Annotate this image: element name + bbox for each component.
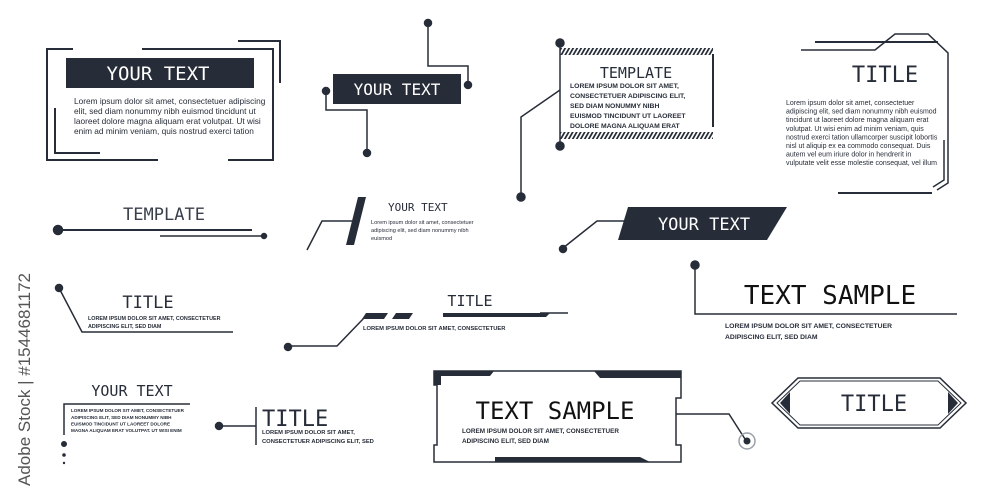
panel: template hatched box: CONSECTETUER ADIPISCING ELIT, (570, 93, 685, 100)
panel: template hatched box: SED DIAM NONUMMY NIBH (570, 103, 659, 110)
panel: template hatched box (517, 39, 713, 201)
panel: your text bracket (61, 382, 190, 464)
panel: your text framed box: elit, sed diam nonummy nibh euismod tincidunt ut (74, 106, 256, 116)
panel: your text framed box (47, 41, 280, 160)
panel: your text framed box: laoreet dolore magna aliquam erat volutpat. Ut wisi (74, 116, 261, 126)
panel: your text bracket: ADIPISCING ELIT, SED DIAM NONUMMY NIBH (71, 415, 172, 420)
panel: template underline: TEMPLATE (123, 205, 205, 225)
panel: template hatched box: TEMPLATE (600, 64, 672, 82)
panel: your text circuit label: YOUR TEXT (354, 80, 441, 99)
panel: title diagonal (56, 284, 233, 332)
panel: template hatched box: DOLORE MAGNA ALIQUAM ERAT (570, 123, 680, 130)
panel: your text framed box: YOUR TEXT (107, 63, 209, 85)
panel: text sample box: TEXT SAMPLE (476, 397, 634, 425)
panel: text sample underline: LOREM IPSUM DOLOR SIT AMET, CONSECTETUER (725, 323, 892, 330)
panel: title corner frame: Lorem ipsum dolor sit amet, consectetuer (786, 100, 915, 107)
panel: your text circuit label (322, 20, 472, 156)
panel: title corner frame: autem vel eum iriure dolor in hendrerit in (786, 152, 911, 159)
panel: title diagonal: LOREM IPSUM DOLOR SIT AMET, CONSECTETUER (88, 316, 221, 322)
panel: your text framed box: enim ad minim veniam, quis nostrud exerci tation (74, 126, 254, 136)
panel: title corner frame: nostrud exerci tation ullamcorper suscipit lobortis (786, 134, 938, 141)
panel: your text bracket: LOREM IPSUM DOLOR SIT AMET, CONSECTETUER (71, 408, 185, 413)
panel: text sample box: ADIPISCING ELIT, SED DIAM (462, 438, 549, 445)
panel: slanted bar label: YOUR TEXT (388, 201, 448, 214)
panel: title with pointer: LOREM IPSUM DOLOR SIT AMET, (262, 430, 355, 436)
panel: text sample underline: ADIPISCING ELIT, SED DIAM (725, 334, 818, 341)
panel: title corner frame (786, 34, 948, 193)
panel: parallelogram your text (560, 207, 787, 252)
panel: text sample underline (691, 261, 957, 341)
panel: title corner frame: volutpat. Ut wisi enim ad minim veniam, quis (786, 126, 924, 133)
panel: your text bracket: YOUR TEXT (91, 382, 173, 400)
panel: title corner frame: TITLE (852, 63, 918, 88)
panel: title corner frame: tincidunt ut laoreet dolore magna aliquam erat (786, 117, 928, 124)
panel: slanted bar label (307, 197, 474, 250)
panel: text sample underline: TEXT SAMPLE (744, 281, 916, 311)
panel: title diagonal: ADIPISCING ELIT, SED DIAM (88, 324, 162, 330)
panel: template underline (54, 205, 266, 238)
panel: slanted bar label: euismod (371, 236, 392, 242)
panel: your text bracket: MAGNA ALIQUAM ERAT VOLUTPAT. UT WISI ENIM (71, 428, 182, 433)
panel: template hatched box: EUISMOD TINCIDUNT UT LAOREET (570, 113, 686, 120)
panel: text sample box: LOREM IPSUM DOLOR SIT AMET, CONSECTETUER (462, 428, 619, 435)
watermark: vertical stock label: Adobe Stock | #1544681172 (15, 273, 34, 486)
panel: title hexagon (772, 378, 966, 428)
panel: title hexagon: TITLE (841, 392, 907, 417)
panel: title diagonal: TITLE (122, 293, 174, 313)
panel: slanted bar label: adipiscing elit, sed diam nonummy nibh (371, 228, 469, 234)
panel: text sample box (434, 371, 755, 462)
panel: title with pointer: TITLE (262, 407, 328, 432)
panel: title with pointer: CONSECTETUER ADIPISCING ELIT, SED (262, 439, 374, 445)
panel: title corner frame: vulputate velit esse molestie consequat, vel illum (786, 160, 937, 167)
panel: your text framed box: Lorem ipsum dolor sit amet, consectetuer adipiscing (74, 96, 266, 106)
panel: title tabs line (284, 292, 568, 350)
panel: your text bracket: EUISMOD TINCIDUNT UT LAOREET DOLORE (71, 422, 170, 426)
panel: title corner frame: adipiscing elit, sed diam nonummy nibh euismod (786, 109, 937, 116)
panel: parallelogram your text: YOUR TEXT (658, 215, 750, 235)
panel: title tabs line: LOREM IPSUM DOLOR SIT AMET, CONSECTETUER (363, 326, 506, 332)
panel: title corner frame: nisl ut aliquip ex ea commodo consequat. Duis (786, 143, 931, 150)
panel: title tabs line: TITLE (447, 292, 493, 310)
panel: slanted bar label: Lorem ipsum dolor sit amet, consectetuer (371, 220, 474, 226)
panel: template hatched box: LOREM IPSUM DOLOR SIT AMET, (570, 83, 679, 90)
panel: title with pointer (216, 407, 374, 445)
